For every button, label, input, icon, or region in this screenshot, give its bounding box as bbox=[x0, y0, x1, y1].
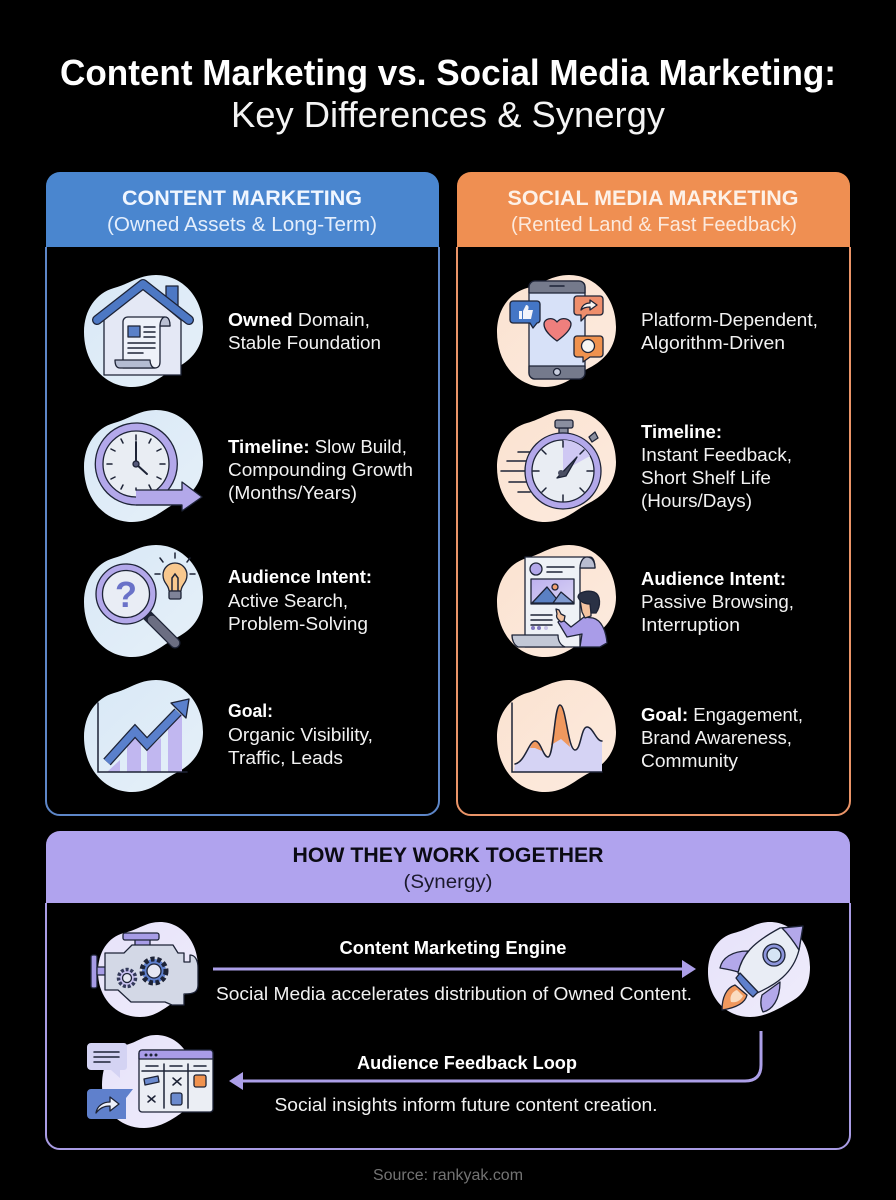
text: owned domain: Owned Domain, bbox=[228, 309, 370, 330]
source: Source: rankyak.com bbox=[373, 1167, 523, 1184]
icon: engagement wave chart bbox=[497, 680, 616, 792]
icon: magnifier and light bulb bbox=[84, 545, 203, 657]
arrow: feedback loop bbox=[229, 1031, 761, 1090]
panel header: social media marketing: SOCIAL MEDIA MARKETING bbox=[508, 187, 798, 210]
text: goal organic visibility: Organic Visibility, bbox=[228, 724, 373, 745]
title bbox=[60, 52, 836, 135]
panel header: content marketing bbox=[46, 172, 439, 247]
text: audience feedback loop: Audience Feedback Loop bbox=[357, 1052, 577, 1073]
title: Content Marketing vs. Social Media Marketing: bbox=[60, 52, 836, 93]
icon: clock with growth arrow bbox=[84, 410, 203, 522]
text: timeline instant feedback: Instant Feedback, bbox=[641, 444, 792, 465]
text: goal organic visibility bbox=[228, 700, 373, 768]
arrow: content to rocket bbox=[213, 960, 696, 978]
text: platform dependent: Platform-Dependent, bbox=[641, 309, 818, 330]
icon: phone with social reactions bbox=[497, 275, 616, 387]
text: goal engagement: Community bbox=[641, 750, 739, 771]
text: audience intent passive browsing: Audience Intent: bbox=[641, 568, 786, 589]
text: platform dependent: Algorithm-Driven bbox=[641, 332, 785, 353]
text: timeline slow build: Compounding Growth bbox=[228, 459, 413, 480]
text: timeline slow build: (Months/Years) bbox=[228, 482, 357, 503]
text: audience intent active search bbox=[228, 566, 372, 634]
text: owned domain: Stable Foundation bbox=[228, 332, 381, 353]
panel header: social media marketing bbox=[457, 172, 850, 247]
panel header: synergy: HOW THEY WORK TOGETHER bbox=[292, 844, 604, 867]
text: audience intent active search: Problem-Solving bbox=[228, 613, 368, 634]
icon: engine with gears bbox=[91, 922, 198, 1017]
text: audience intent active search: Audience Intent: bbox=[228, 566, 372, 587]
text: audience intent passive browsing: Passive Browsing, bbox=[641, 591, 794, 612]
icon: stopwatch with speed lines bbox=[497, 410, 616, 522]
title: Key Differences & Synergy bbox=[231, 94, 665, 135]
text: goal engagement: Brand Awareness, bbox=[641, 727, 792, 748]
panel header: content marketing: (Owned Assets & Long-Term) bbox=[107, 214, 377, 236]
icon: feedback board with chat bubbles bbox=[87, 1035, 213, 1128]
text: goal organic visibility: Traffic, Leads bbox=[228, 747, 343, 768]
icon: person browsing feed bbox=[497, 545, 616, 657]
text: insights description: Social insights inform future content creation. bbox=[274, 1094, 658, 1115]
text: owned domain bbox=[228, 309, 381, 353]
panel header: synergy bbox=[46, 831, 850, 903]
text: goal engagement: Goal: Engagement, bbox=[641, 704, 803, 725]
text: goal organic visibility: Goal: bbox=[228, 700, 273, 721]
icon: house with document bbox=[84, 275, 203, 387]
panel header: synergy: (Synergy) bbox=[404, 872, 492, 893]
icon: magnifier and light bulb: ? bbox=[115, 574, 137, 615]
text: timeline slow build bbox=[228, 436, 413, 503]
panel: how they work together bbox=[46, 831, 850, 1149]
text: audience intent passive browsing bbox=[641, 568, 794, 635]
text: timeline instant feedback bbox=[641, 421, 792, 511]
icon: rocket bbox=[708, 922, 810, 1017]
text: timeline instant feedback: (Hours/Days) bbox=[641, 490, 752, 511]
panel header: social media marketing: (Rented Land & Fast Feedback) bbox=[511, 214, 797, 236]
panel: social media marketing bbox=[457, 172, 850, 815]
text: timeline instant feedback: Timeline: bbox=[641, 421, 722, 442]
icon: rising bar chart bbox=[84, 680, 203, 792]
text: content marketing engine: Content Marketing Engine bbox=[340, 937, 566, 958]
text: distribution description: Social Media accelerates distribution of Owned Content. bbox=[216, 983, 692, 1004]
text: audience intent passive browsing: Interruption bbox=[641, 614, 740, 635]
text: audience intent active search: Active Search, bbox=[228, 590, 348, 611]
panel header: content marketing: CONTENT MARKETING bbox=[122, 187, 362, 210]
text: timeline slow build: Timeline: Slow Build, bbox=[228, 436, 407, 457]
panel: content marketing bbox=[46, 172, 439, 815]
text: platform dependent bbox=[641, 309, 818, 353]
text: goal engagement bbox=[641, 704, 803, 771]
text: timeline instant feedback: Short Shelf Life bbox=[641, 467, 771, 488]
